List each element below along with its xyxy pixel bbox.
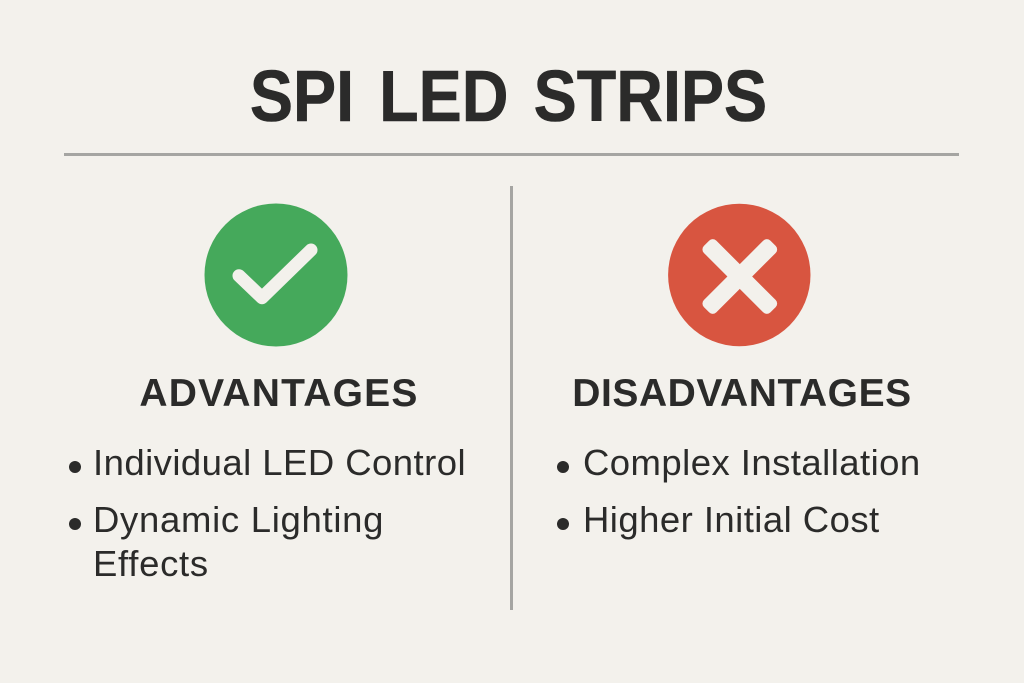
center divider	[510, 186, 513, 610]
item: dynamic lighting effects	[93, 499, 384, 584]
bullet	[68, 518, 80, 530]
panel: advantages	[69, 204, 466, 584]
item: dynamic lighting effects: Effects	[93, 542, 209, 584]
bullet	[557, 460, 569, 472]
disadvantages list	[557, 442, 921, 540]
item: dynamic lighting effects: Dynamic Lighting	[93, 499, 384, 540]
bullet	[557, 518, 569, 530]
item: higher initial cost: Higher Initial Cost	[583, 499, 880, 540]
heading: disadvantages: DISADVANTAGES	[572, 372, 912, 415]
item: complex installation: Complex Installation	[583, 442, 921, 483]
advantages list	[69, 442, 466, 584]
title: SPI LED STRIPS	[250, 57, 767, 137]
icon: red x circle	[668, 204, 810, 346]
item: individual LED control: Individual LED Control	[93, 442, 466, 483]
panel: disadvantages	[557, 204, 921, 540]
bullet	[68, 460, 80, 472]
heading: advantages: ADVANTAGES	[139, 372, 419, 415]
icon: green check circle	[204, 204, 348, 346]
title rule	[64, 153, 959, 156]
